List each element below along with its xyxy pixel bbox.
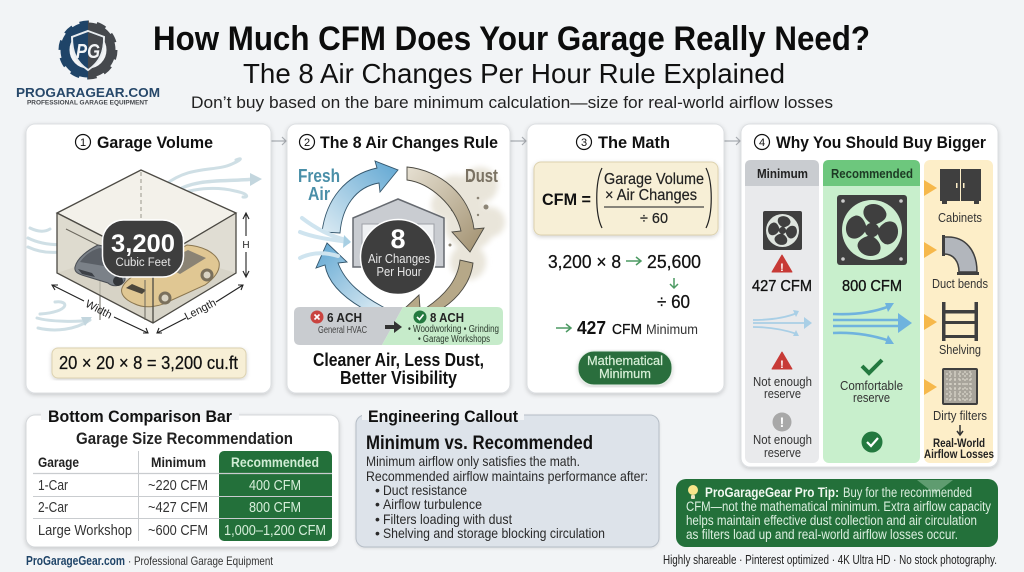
air changes badge: Air Changes [368,252,430,266]
formula box: CFM = [542,190,591,209]
air changes badge [360,220,436,294]
pill: mathematical minimum: Mathematical [587,353,663,368]
heading: buy bigger: 4 [759,137,765,149]
math steps: Minimum [646,322,698,337]
column: recommended: Comfortable [840,378,903,393]
icon: big fan [837,195,907,265]
table header: Recommended [231,455,319,470]
column: recommended [823,160,920,463]
dimension labels [83,240,250,323]
dust cloud [431,167,505,280]
column: airflow losses [924,160,994,463]
icon: shelving [942,302,978,341]
callout body: Airflow turbulence [383,496,482,512]
ACH comparison bar [294,307,503,345]
arrow: dust top [407,167,484,252]
column: minimum: reserve [764,386,801,401]
ACH comparison bar: • Woodworking • Grinding [408,324,499,335]
heading: garage volume: 1 [80,137,86,149]
table rows: 800 CFM [249,500,301,516]
panel: engineering callout [356,407,659,547]
icon: duct bend [942,235,979,275]
connector arrows between panels [271,137,740,145]
label: fresh air: Air [308,184,330,204]
fresh-air streams [300,218,351,258]
footer left: · Professional Garage Equipment [128,554,274,568]
panel 1: garage volume [26,124,271,393]
heading: air changes rule: The 8 Air Changes Rule [320,133,498,152]
pro tip text: ProGarageGear Pro Tip: [705,485,839,500]
volume formula [52,348,246,378]
icon: warning [772,352,792,371]
icon: green check [414,310,426,324]
formula box [534,162,718,235]
column: minimum: Not enough [753,374,812,389]
heading: engineering callout: Engineering Callout [368,407,518,426]
math steps: 3,200 × 8 [548,252,621,272]
table header [38,455,319,470]
recommended column fill [219,451,332,541]
column: airflow losses: Shelving [939,342,981,357]
label: fresh air: Fresh [298,166,340,186]
volume badge: Cubic Feet [116,257,171,269]
icon: green check badge [862,432,882,452]
pro tip text: helps maintain effective dust collection and air circulation [686,513,977,528]
icon: garage house [353,199,444,267]
table rows: 1-Car [38,478,68,494]
column: airflow losses: Real-World [933,438,985,450]
garage box [57,170,236,323]
dimension labels: Width [83,298,114,322]
callout body: Filters loading with dust [383,511,512,527]
pro tip text: Buy for the recommended [843,485,972,500]
table grid [33,451,332,541]
callout body: • [375,511,380,527]
ACH comparison bar: General HVAC [318,325,367,336]
table rows: ~600 CFM [148,523,208,539]
math steps: ÷ 60 [657,292,690,312]
table rows: 400 CFM [249,478,301,494]
logo: ProGarageGear: PROGARAGEAR.COM [16,85,160,100]
callout body: • [375,482,380,498]
arrows: weak airflow [753,310,812,336]
table header: Minimum [151,455,206,470]
table rows [38,478,326,539]
formula box: × Air Changes [605,187,697,204]
pill: mathematical minimum [578,351,672,385]
arrow: down to losses [957,425,963,435]
icon: warning: ! [780,359,784,371]
column: airflow losses: Airflow Losses [924,449,994,461]
airflow swooshes [28,159,262,330]
column: airflow losses: Dirty filters [933,408,987,423]
column: minimum: reserve [764,445,801,460]
table rows: 2-Car [38,500,68,516]
heading: garage size recommendation: Garage Size Recommendation [76,430,293,448]
table rows: Large Workshop [38,523,132,539]
takeaway text [313,350,484,388]
icon: gray alert: ! [780,414,784,430]
panel 2: the 8 air changes rule [287,124,510,393]
callout body: • [375,496,380,512]
math steps: CFM [612,321,642,338]
callout body: Duct resistance [383,482,467,498]
panel 3: the math [527,124,724,393]
column: recommended: reserve [853,390,890,405]
title: How Much CFM Does Your Garage Really Need? [153,20,870,58]
icon: tan car [122,245,219,307]
heading: air changes rule: 2 [304,137,310,149]
takeaway text: Better Visibility [340,368,457,388]
footer left: ProGarageGear.com [26,554,125,568]
logo: ProGarageGear [16,24,160,106]
takeaway text: Cleaner Air, Less Dust, [313,350,484,370]
table header: Garage [38,455,79,470]
column: minimum: 427 CFM [752,278,812,295]
icon: gray alert [772,412,792,432]
heading: buy bigger: Why You Should Buy Bigger [776,133,986,152]
column: airflow losses: Duct bends [932,276,988,291]
column: recommended: 800 CFM [842,278,902,295]
table rows: ~427 CFM [148,500,208,516]
icon: warning [772,255,792,274]
pro tip text [686,485,991,542]
formula box: Garage Volume [604,171,704,188]
panel 4: why you should buy bigger [741,124,998,467]
volume formula: 20 × 20 × 8 = 3,200 cu.ft [59,353,238,373]
ACH comparison bar: 8 ACH [430,310,464,325]
heading: bottom comparison bar: Bottom Comparison Bar [48,407,232,426]
label: fresh air [298,166,340,204]
icon: dirty filter [943,369,977,404]
heading: the math: The Math [598,133,670,152]
pill: mathematical minimum: Minimum [599,366,651,381]
table rows: 1,000–1,200 CFM [224,523,326,539]
icon: light bulb [688,485,698,499]
formula box: ÷ 60 [640,210,668,227]
callout body: Shelving and storage blocking circulation [383,525,605,541]
dimension labels: H [242,240,250,251]
icon: gray car [75,245,125,286]
dimension labels: Length [183,297,218,323]
logo: ProGarageGear: PROFESSIONAL GARAGE EQUIPMENT [27,100,148,106]
air changes badge: 8 [390,224,406,254]
air changes badge: Per Hour [376,265,422,279]
callout body: • [375,525,380,541]
arrows: strong airflow [833,303,912,344]
pro tip text: as filters load up and real-world airflow losses occur. [686,527,958,542]
ACH comparison bar: 6 ACH [327,310,362,325]
arrow: fresh air bottom [316,243,385,308]
math steps: 25,600 [647,252,701,272]
ACH comparison bar: • Garage Workshops [418,334,490,345]
icon: check mark [862,360,882,373]
column: minimum: Not enough [753,432,812,447]
arrow: fresh air top [322,161,398,233]
callout body: Recommended airflow maintains performance after: [366,468,648,484]
arrow: 6 to 8 ACH [385,321,402,333]
icon: warning: ! [780,262,784,274]
arrow: dust bottom [405,260,473,308]
column: recommended: Recommended [831,167,913,181]
volume badge [102,220,184,277]
tagline: Don’t buy based on the bare minimum calculation—size for real-world airflow losses [191,93,833,112]
heading: the math: 3 [581,137,587,149]
volume badge: 3,200 [111,230,175,258]
callout body [366,453,648,541]
icon: red cross [310,310,324,324]
heading: minimum vs recommended: Minimum vs. Recommended [366,433,593,454]
loss markers [924,180,937,395]
logo: ProGarageGear: PG [76,41,100,63]
heading: garage volume: Garage Volume [97,133,213,152]
column: minimum [745,160,819,463]
dust specks [442,179,488,276]
panel: bottom comparison table [26,407,339,547]
panel: pro tip [676,479,998,547]
math steps: 427 [577,318,606,338]
column: airflow losses: Cabinets [938,210,982,225]
column: minimum: Minimum [757,167,808,181]
icon: small fan [763,211,802,250]
subtitle: The 8 Air Changes Per Hour Rule Explained [243,58,785,89]
footer left [26,554,274,568]
label: dust: Dust [465,166,498,186]
icon: cabinets [940,169,981,204]
dimension arrows [52,213,249,333]
table rows: ~220 CFM [148,478,208,494]
math steps [548,252,701,338]
callout body: Minimum airflow only satisfies the math. [366,453,580,469]
